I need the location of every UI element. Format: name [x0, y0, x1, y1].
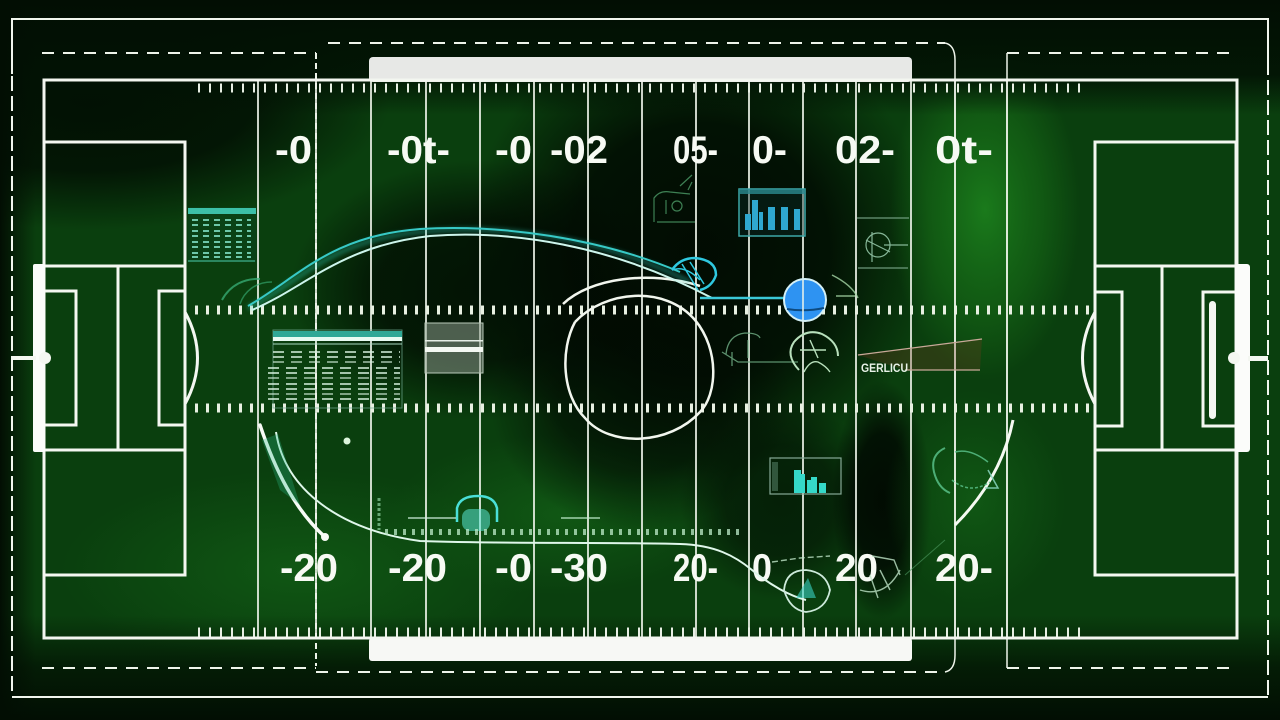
helmet diagram: lower left — [408, 496, 497, 531]
yard numbers top row: -02 — [550, 129, 608, 172]
yard lines — [258, 80, 1007, 638]
yard numbers bottom row — [280, 547, 993, 590]
upper trajectory arc — [222, 228, 790, 310]
table: upper left — [188, 207, 256, 262]
yard numbers bottom row: -30 — [550, 547, 608, 590]
yard numbers bottom row: 20- — [673, 547, 718, 590]
icon: circular helmet bottom — [784, 570, 830, 612]
yard numbers top row: 02- — [835, 129, 895, 172]
arc sketch near blue marker — [832, 275, 858, 298]
lower trajectory curve — [260, 420, 1013, 600]
data tick line — [561, 517, 600, 519]
icon: sketch upper — [654, 175, 695, 222]
yard numbers top row — [275, 129, 993, 172]
field boundary — [44, 80, 1237, 638]
bottom white bar — [369, 638, 912, 661]
hash mark rows — [195, 310, 1092, 408]
yard numbers bottom row: 20 — [835, 547, 878, 590]
yard numbers top row: -0t- — [387, 129, 450, 172]
yard numbers top row: -0 — [275, 129, 312, 172]
icon: sketched helmet — [722, 333, 798, 366]
icon: swirl helmet right — [933, 448, 998, 493]
yard numbers top row: -0 — [495, 129, 532, 172]
field marker dot — [344, 438, 350, 444]
data points along lower curve — [385, 529, 745, 535]
table: center left — [268, 330, 402, 408]
yard numbers bottom row: -20 — [280, 547, 338, 590]
sketch scribble beside numbers — [772, 540, 945, 598]
small vertical data column — [378, 498, 380, 530]
center ellipse — [563, 278, 713, 439]
bar chart: upper — [739, 189, 805, 236]
helmet icon: teal — [672, 258, 716, 290]
icon: round helmet — [790, 332, 838, 372]
yard numbers bottom row: 0 — [752, 547, 772, 590]
yard numbers bottom row: 20- — [935, 547, 993, 590]
wedge callout with label — [858, 339, 982, 375]
wedge callout with label: GERLICU — [861, 361, 908, 375]
blue circle marker — [784, 279, 826, 321]
yard numbers bottom row: -20 — [388, 547, 447, 590]
yard numbers top row: 05- — [673, 129, 718, 172]
tick marks along sidelines — [198, 88, 1082, 632]
small data panel — [425, 323, 483, 373]
yard numbers top row: 0- — [752, 129, 787, 172]
right end zone markings — [1082, 142, 1268, 575]
bar chart: lower — [770, 458, 841, 494]
yard numbers bottom row: -0 — [495, 547, 532, 590]
player diagram: upper right — [857, 218, 909, 268]
top white bar — [369, 57, 912, 82]
yard numbers top row: 0t- — [935, 129, 993, 172]
left end zone markings — [12, 142, 198, 575]
